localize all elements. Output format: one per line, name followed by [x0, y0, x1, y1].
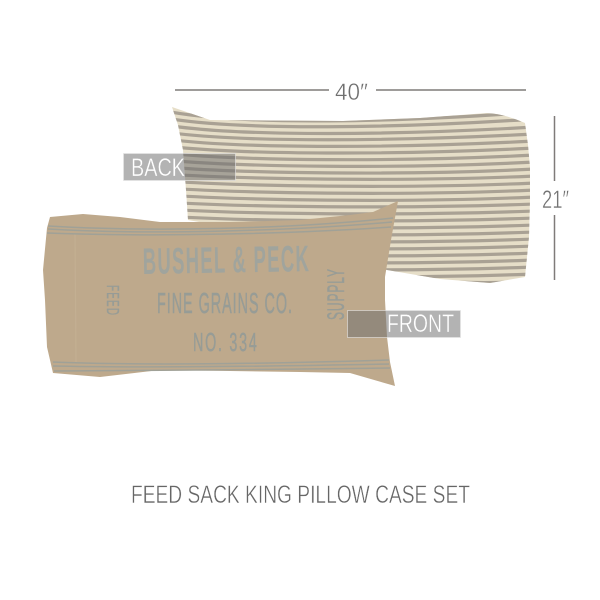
sack text: BUSHEL & PECK: BUSHEL & PECK	[142, 239, 309, 283]
front pillow case	[43, 201, 398, 386]
label: FRONT	[348, 310, 460, 338]
label: BACK	[124, 154, 236, 182]
sack text: SUPPLY: SUPPLY	[324, 269, 350, 320]
sack text: FEED: FEED	[102, 285, 122, 315]
bottom stripe band	[53, 360, 390, 371]
sack text: FINE GRAINS CO.: FINE GRAINS CO.	[157, 286, 292, 319]
label: BACK: BACK	[131, 154, 185, 182]
width dimension: 40 inches: 40″	[335, 79, 368, 106]
caption: FEED SACK KING PILLOW CASE SET	[131, 481, 470, 509]
sack text: NO. 334: NO. 334	[193, 329, 257, 357]
label: FRONT: FRONT	[387, 310, 454, 338]
pillow fold line	[75, 233, 76, 362]
height dimension: 21 inches: 21″	[542, 186, 569, 214]
back pillow case	[165, 107, 535, 283]
top stripe band	[47, 218, 393, 235]
